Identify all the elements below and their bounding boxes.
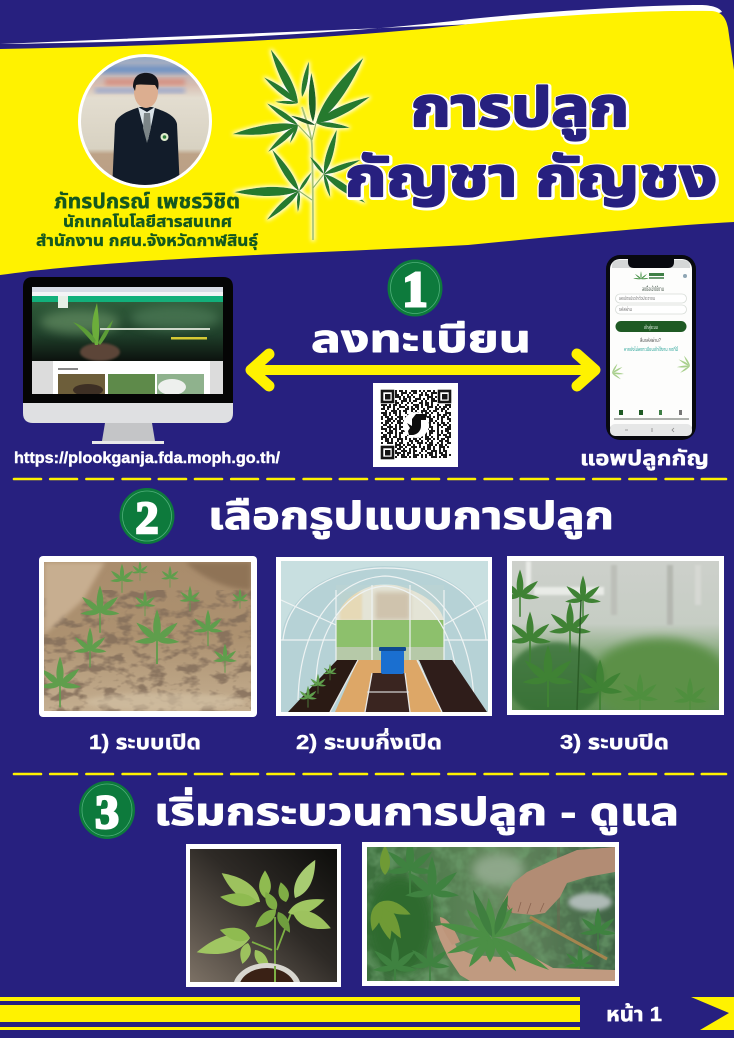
- footer stripes: [0, 997, 580, 1030]
- page tab: [606, 997, 734, 1030]
- app label: แอพปลูกกัญ: [580, 448, 709, 470]
- step 3 badge: 3: [95, 786, 119, 839]
- website URL: https://plookganja.fda.moph.go.th/: [14, 450, 281, 467]
- icon: smartphone with app: เลขบัตรประจำตัวประชาชน: [619, 295, 655, 302]
- title: การปลูก: [411, 78, 629, 140]
- step 1 badge: 1: [402, 261, 428, 317]
- icon: smartphone with app: ลืมรหัสผ่าน?: [640, 337, 661, 344]
- step 1 heading: ลงทะเบียน: [311, 319, 531, 361]
- step 1 badge: [388, 260, 442, 317]
- double arrow: [251, 354, 595, 386]
- page tab: หน้า 1: [606, 1004, 662, 1026]
- title: การปลูก: [412, 79, 630, 141]
- speaker name and title: นักเทคโนโลยีสารสนเทศ: [63, 214, 232, 231]
- portrait: speaker: [78, 54, 212, 190]
- speaker name and title: [36, 191, 258, 250]
- title: กัญชา กัญชง: [346, 149, 718, 209]
- photo: seedling: [186, 844, 341, 987]
- icon: smartphone with app: [606, 255, 696, 440]
- icon: smartphone with app: หากยังไม่ลงทะเบียนเข้าใช้งาน กดที่นี่: [624, 345, 678, 353]
- icon: smartphone with app: เข้าสู่ระบบ: [644, 324, 658, 331]
- step 2 badge: 2: [136, 492, 158, 543]
- photo: hands with plant: [362, 837, 619, 992]
- title: กัญชา กัญชง: [345, 148, 717, 208]
- speaker name and title: ภัทรปกรณ์ เพชรวิชิต: [54, 191, 240, 213]
- photo: open field: [39, 556, 257, 717]
- photo captions: 1) ระบบเปิด: [89, 732, 201, 754]
- icon: desktop monitor with website: [23, 277, 233, 444]
- step 2 heading: เลือกรูปแบบการปลูก: [208, 496, 614, 539]
- icon: smartphone with app: รหัสผ่าน: [619, 306, 632, 313]
- speaker name and title: สำนักงาน กศน.จังหวัดกาฬสินธุ์: [36, 233, 258, 250]
- icon: cannabis plant: [232, 48, 372, 240]
- QR code: [373, 383, 458, 467]
- photo captions: [89, 728, 669, 754]
- step 2 badge: [120, 488, 174, 544]
- photo: greenhouse: [276, 557, 492, 716]
- photo: closed system: [500, 556, 730, 722]
- photo captions: 2) ระบบกึ่งเปิด: [296, 728, 442, 754]
- header banner: [0, 5, 734, 275]
- step 3 badge: [79, 781, 135, 839]
- icon: smartphone with app: ลงชื่อเข้าใช้งาน: [642, 284, 664, 293]
- title: [345, 78, 718, 209]
- photo captions: 3) ระบบปิด: [560, 732, 669, 754]
- step 3 heading: เริ่มกระบวนการปลูก - ดูแล: [154, 787, 679, 835]
